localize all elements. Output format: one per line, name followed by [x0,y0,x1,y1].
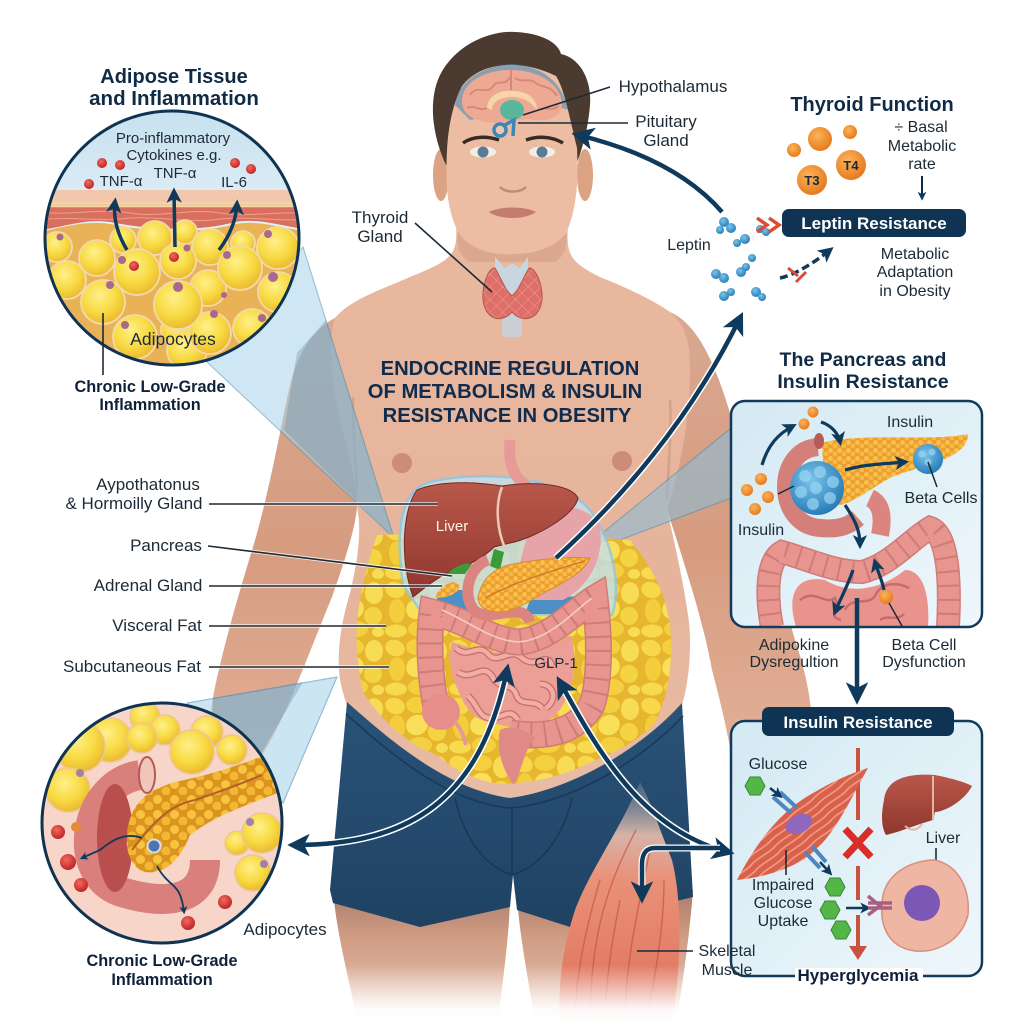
panel border [731,401,982,627]
panel small intestine loops [800,584,909,620]
adrenal gland [435,582,459,598]
metabolic adaptation: Metabolic [881,246,949,263]
glucose text: Glucose [749,756,807,773]
text: beta cell dysfunction [882,637,966,671]
right leg [517,890,693,1024]
title: ENDOCRINE REGULATION [381,358,639,380]
top leader lines [415,87,628,292]
heading: pancreas [777,349,949,393]
label: chronic low-grade inflammation bottom: Chronic Low-Grade [86,952,238,970]
nose [500,187,526,192]
top labels: Gland [357,227,403,246]
heading: pancreas: The Pancreas and [780,349,946,371]
cecum [422,694,460,730]
top labels: Thyroid [352,208,408,227]
bottom fade to white [320,965,700,1024]
hyperglycemia: Hyperglycemia [798,966,919,985]
inset pancreas [127,755,285,872]
metabolic adaptation: Adaptation [877,264,953,281]
metabolic adaptation: in Obesity [879,283,951,300]
left ear [433,149,449,201]
large intestine [430,598,598,735]
panel: pancreas and insulin resistance: Insulin [738,522,784,539]
cytokine text: Pro-inflammatory [116,130,231,147]
face [446,65,578,254]
brain [462,70,562,123]
line to text [785,850,787,875]
liver cell receptor [868,896,892,915]
right ear [577,149,593,201]
leptin label: Leptin [667,237,711,254]
wedge tint over shoulder [284,320,394,538]
small arrows [770,788,868,908]
arrow: leptin to pituitary [578,135,722,212]
left arm [209,312,380,790]
pancreas [478,557,590,612]
inset adipocytes [46,702,282,891]
brain folds [467,70,558,110]
label: chronic low-grade inflammation top: Inflammation [99,396,201,414]
vertical red line [856,748,860,948]
callout wedge: top-left circle to liver [207,247,394,538]
text: skeletal muscle: Skeletal [699,943,755,960]
top labels [352,77,727,246]
metabolic adaptation [877,246,953,300]
duodenum [468,560,530,622]
head [433,32,593,254]
liver [404,483,578,597]
label: chronic low-grade inflammation bottom: Inflammation [111,971,213,989]
intestine loops [456,648,553,720]
title [368,358,642,427]
cytokine dots [84,158,256,271]
panel tube opening [814,433,824,449]
callout wedge: pancreas panel [572,428,731,558]
panel text: Insulin [887,414,933,431]
inset red cells [51,825,232,930]
subcutaneous and visceral fat [356,530,671,784]
inset duct [132,775,262,850]
adipocytes [42,220,299,370]
T3 T4 hormone spheres: T3 [804,173,820,188]
hypothalamus [500,100,524,120]
leptin resistance badge [782,209,966,237]
inset outline [42,703,282,943]
organ text: Liver: Liver [436,518,468,535]
inset duodenum [89,775,205,899]
text: adipokine dysregulation: Dysregultion [750,654,838,671]
left organ labels: Subcutaneous Fat [63,657,201,676]
cytokine text: Cytokines e.g. [126,147,222,164]
text: adipokine dysregulation [750,637,838,671]
skeletal muscle [560,782,680,1024]
text: skeletal muscle [699,943,755,979]
receptors [773,792,797,813]
cytokine text: TNF-α [100,173,143,190]
chest shading [353,397,671,500]
organs [400,440,616,785]
basal metabolic rate: ÷ Basal [894,119,948,136]
pancreatic duct [485,561,585,598]
thyroid gland [483,257,542,337]
adipocytes text: Adipocytes [130,329,216,349]
text: beta cell dysfunction: Dysfunction [882,654,966,671]
panel insulin dots [741,406,893,604]
liver cell [882,860,968,951]
wedge tint over forearm [212,682,303,780]
panel: pancreas and insulin resistance: Beta Cells [905,490,977,507]
left leg [333,890,510,1024]
left organ labels: & Hormoilly Gland [66,494,202,513]
pituitary gland [494,124,506,136]
leader line: skeletal muscle [637,950,693,952]
heading: adipose tissue: Adipose Tissue [100,66,248,88]
neck shading [457,225,567,262]
impaired uptake text: Impaired [752,877,814,894]
left organ labels [63,475,202,676]
panel: insulin resistance: Insulin Resistance [783,713,933,732]
appendix [455,722,466,745]
panel: pancreas and insulin resistance [731,401,982,633]
organ text: GLP-1: GLP-1 [534,655,578,672]
skin layer [40,190,310,206]
panel: insulin resistance [731,707,982,985]
basal metabolic rate: rate [908,156,936,173]
heading: thyroid function: Thyroid Function [790,94,954,116]
red X [845,829,871,857]
top labels: Hypothalamus [619,77,727,96]
oesophagus [510,440,528,487]
impaired uptake text [752,877,814,930]
text: adipocytes lower: Adipocytes [243,920,327,939]
basal metabolic rate: Metabolic [888,138,956,155]
panel liver [882,775,972,835]
left organ labels: Visceral Fat [112,616,202,635]
label: chronic low-grade inflammation top [74,378,226,414]
panel colon haustra [768,528,949,627]
inset islet [148,840,160,852]
text: beta cell dysfunction: Beta Cell [892,637,956,654]
impaired uptake text: Glucose [754,895,812,912]
arrow: bend to muscle [642,848,720,897]
muscle nucleus [783,810,815,838]
label: chronic low-grade inflammation top: Chronic Low-Grade [74,378,226,396]
arrow: stomach to leptin [556,318,740,558]
left organ labels: Pancreas [130,536,202,555]
heading: adipose tissue [89,66,259,110]
label: chronic low-grade inflammation bottom [86,952,238,989]
heading: adipose tissue: and Inflammation [89,87,259,110]
shorts [330,702,693,927]
heading: pancreas: Insulin Resistance [777,371,949,393]
T3 T4 hormone spheres [787,125,866,195]
left organ labels: Adrenal Gland [94,576,202,595]
red arrowhead [849,946,867,960]
pituitary stalk [503,120,514,136]
shorts seams [346,714,683,875]
left organ labels: Aypothatonus [96,475,200,494]
muscle cell [737,768,868,880]
leader [935,848,937,874]
brain glow [455,64,568,120]
title: RESISTANCE IN OBESITY [383,405,632,427]
panel duodenum [786,447,858,528]
mouth [489,208,536,218]
stomach [510,507,601,600]
hyperglycemia backing [795,968,923,984]
subcutaneous background [46,222,298,364]
glucose hexagons [745,777,851,939]
arrow: inset to abdomen [294,670,507,845]
organ halo [400,476,616,615]
eyes [463,137,563,158]
inner brain crescent [487,91,537,110]
T3 T4 hormone spheres: T4 [843,158,859,173]
blocked arrow [780,250,830,282]
inset tube opening [139,757,155,793]
left leader lines [208,504,452,667]
rectum [499,728,535,785]
beta cell cluster small [913,444,943,474]
badge [762,707,954,736]
cytokine text: IL-6 [221,174,247,191]
panel liver ligament and gallbladder [905,776,933,830]
panel arrows [762,422,905,612]
panel colon [768,528,949,627]
blue backing [432,590,590,614]
cytokine arrows [115,192,237,250]
right arm [650,312,812,780]
panel leader lines [778,462,937,633]
beta cell cluster large [790,461,844,515]
panel pancreas [822,434,968,506]
hair [433,32,590,165]
text: skeletal muscle: Muscle [702,962,752,979]
nuclei [56,230,278,329]
arrow: GLP-1 to muscle panel [560,682,728,852]
arrow: pancreas panel to insulin resistance [855,598,859,698]
liver text: Liver [926,830,961,847]
cytokine text: TNF-α [154,165,197,182]
leptin molecules [711,217,770,301]
inset orange cells [71,822,81,832]
impaired uptake text: Uptake [758,913,808,930]
panel small intestine [792,570,928,627]
figure: man's body [209,225,812,1024]
nipples [392,451,632,473]
small intestine [450,635,574,727]
leader line: chronic inflammation [102,313,104,375]
circle: lower-left pancreas inset [42,702,285,943]
cytokine text [100,130,247,191]
leptin resistance badge: Leptin Resistance [801,214,947,233]
text: adipokine dysregulation: Adipokine [759,637,829,654]
top labels: Pituitary [635,112,697,131]
torso [331,225,690,825]
falciform ligament [498,487,505,548]
gallbladder [447,549,504,574]
circle: adipose tissue inset [40,111,310,372]
circle outline [45,111,299,365]
top labels: Gland [643,131,689,150]
red chevrons [757,218,779,232]
callout wedge: lower-left circle to abdomen [187,677,337,803]
title: OF METABOLISM & INSULIN [368,381,642,403]
inset lumen [97,784,133,892]
basal metabolic rate [888,119,956,198]
liver cell nucleus [904,885,940,921]
inset nuclei [76,769,268,868]
panel vertical tube [870,498,882,535]
inset arrows [82,836,184,912]
